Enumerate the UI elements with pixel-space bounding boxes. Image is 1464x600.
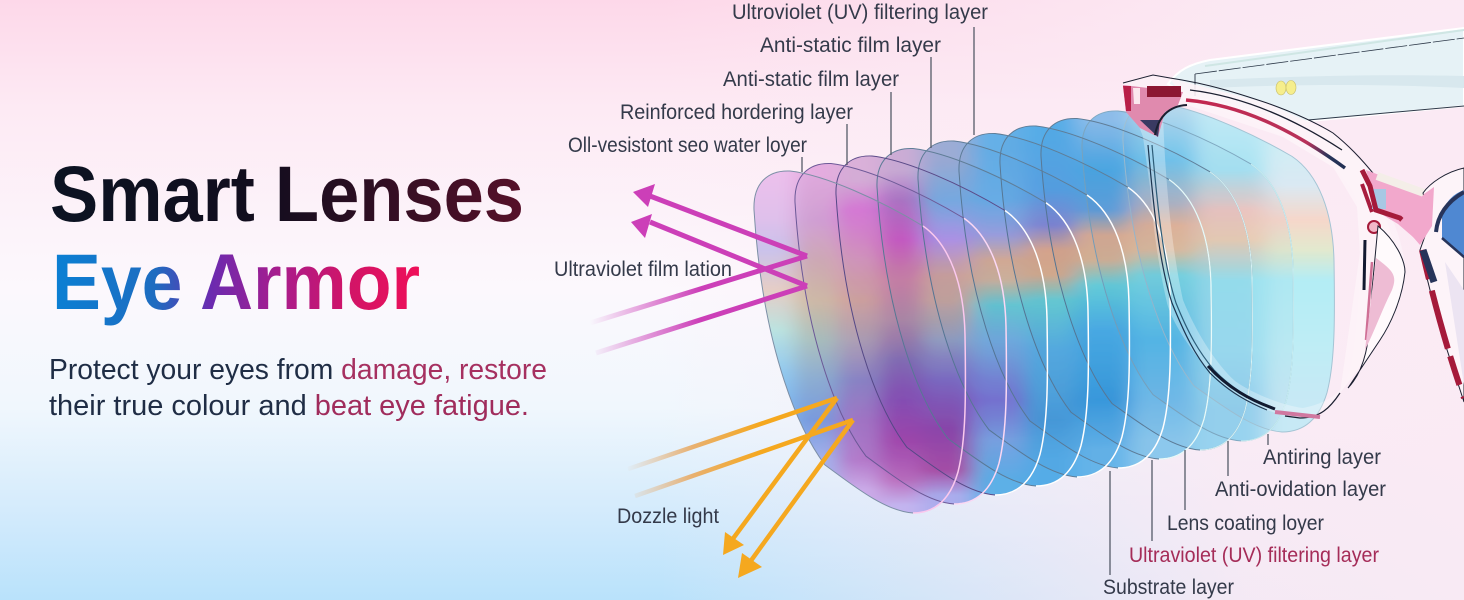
lens layer 4 (877, 148, 1088, 486)
outer frame outline (1123, 75, 1377, 178)
lens layer 2 (795, 163, 1006, 504)
icon: yellow sensor dots (1276, 80, 1296, 95)
title: Smart Lenses (50, 149, 524, 238)
clear frame body (1123, 75, 1405, 418)
subtitle text (49, 354, 547, 422)
lens layer 7 (1000, 126, 1211, 459)
lens layer 6 (959, 133, 1170, 468)
dazzle label: Dozzle light (617, 505, 719, 528)
bottom layer labels: Substrate layer (1103, 576, 1234, 599)
bottom layer labels (1103, 434, 1386, 599)
ultraviolet label: Ultraviolet film lation (554, 258, 732, 281)
crimson top rim (1186, 100, 1345, 168)
temple arm of glasses (1168, 28, 1464, 122)
top layer labels (568, 1, 988, 172)
lens layer 1 (754, 171, 965, 513)
glasses frame (1123, 75, 1464, 418)
lens colour field (754, 108, 1334, 512)
lens layer 9 (1082, 111, 1293, 441)
nose pad (1348, 226, 1405, 388)
title: Eye Armor (52, 237, 420, 326)
bottom layer labels: Lens coating loyer (1167, 512, 1324, 535)
purple arrows: ultraviolet light (590, 184, 807, 353)
right lens frame stripe (1422, 250, 1464, 398)
bridge (1366, 170, 1434, 243)
bottom layer labels: Ultraviolet (UV) filtering layer (1129, 544, 1379, 567)
dark outer rim lines (1190, 90, 1342, 150)
subtitle text: their true colour and beat eye fatigue. (49, 390, 529, 422)
hinge (1123, 85, 1183, 137)
top layer labels: Ultroviolet (UV) filtering layer (732, 1, 988, 24)
neighbouring right lens (1420, 168, 1464, 402)
top layer labels: Anti-static film layer (760, 34, 941, 57)
lens layers stack (753, 106, 1335, 514)
top layer labels: Reinforced hordering layer (620, 101, 853, 124)
lens layer 3 (836, 156, 1047, 495)
right side crimson rim (1362, 184, 1372, 212)
top layer labels: Oll-vesistont seo water loyer (568, 134, 807, 157)
top layer labels: Anti-static film layer (723, 68, 899, 91)
bottom layer labels: Anti-ovidation layer (1215, 478, 1386, 501)
subtitle text: Protect your eyes from damage, restore (49, 354, 547, 386)
lens layer 5 (918, 141, 1129, 477)
dark lower rim lines (1148, 145, 1267, 410)
clear upper and right frame fill (1170, 78, 1405, 393)
lens layer 10 (1123, 103, 1334, 432)
lens layer 8 (1041, 118, 1252, 450)
title (50, 149, 524, 326)
orange arrows: dazzle light (628, 398, 853, 578)
bottom layer labels: Antiring layer (1263, 446, 1381, 469)
